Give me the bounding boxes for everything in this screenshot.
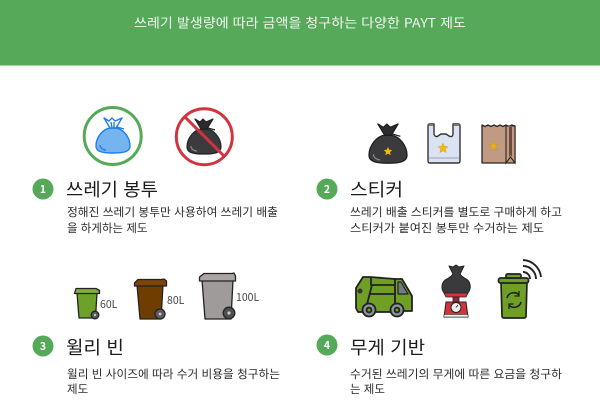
description: 는 제도 — [350, 381, 385, 397]
number badge 1 — [32, 178, 54, 200]
description: 정해진 쓰레기 봉투만 사용하여 쓰레기 배출 — [67, 204, 278, 220]
description: 을 하게하는 제도 — [67, 220, 148, 236]
heading: garbage bag: 쓰레기 봉투 — [66, 176, 158, 202]
number badge 2: 2 — [324, 182, 330, 197]
icon: black bag with star — [369, 124, 407, 163]
icon: forbidden black bag — [176, 109, 232, 165]
heading: wheelie bin: 윌리 빈 — [66, 334, 124, 360]
description: 윌리 빈 사이즈에 따라 수거 비용을 청구하는 — [67, 366, 280, 382]
description: 쓰레기 배출 스티커를 별도로 구매하게 하고 — [350, 204, 562, 220]
panel: weight based — [316, 260, 562, 397]
number badge 3 — [32, 336, 54, 356]
number badge 2 — [316, 178, 338, 200]
icon: 80L brown bin — [134, 279, 166, 319]
icon: paper bag with star — [482, 125, 515, 163]
panel: wheelie bin — [32, 273, 280, 397]
number badge 1: 1 — [40, 182, 46, 197]
label 100L: 100L — [236, 290, 259, 305]
icon: 60L green bin — [74, 288, 100, 319]
icon: garbage truck — [356, 277, 412, 316]
description: 스티커가 붙여진 봉투만 수거하는 제도 — [350, 220, 544, 236]
icon: smart bin with signal — [498, 260, 541, 318]
label 80L: 80L — [167, 293, 185, 308]
icon: bag on scale — [442, 265, 470, 317]
number badge 3: 3 — [40, 339, 46, 354]
title: 쓰레기 발생량에 따라 금액을 청구하는 다양한 PAYT 제도 — [134, 12, 466, 32]
heading: sticker: 스티커 — [350, 176, 403, 202]
header banner — [0, 0, 600, 66]
panel: sticker — [316, 124, 562, 236]
icon: plastic bag with star — [428, 124, 460, 163]
description: 제도 — [67, 381, 88, 397]
heading: weight based: 무게 기반 — [350, 334, 425, 360]
panel: garbage bag — [32, 108, 278, 236]
icon: allowed blue bag — [84, 108, 141, 164]
icon: 100L grey bin — [200, 273, 236, 319]
number badge 4 — [316, 334, 338, 356]
label 60L: 60L — [100, 297, 118, 312]
number badge 4: 4 — [324, 338, 330, 353]
description: 수거된 쓰레기의 무게에 따른 요금을 청구하 — [350, 366, 562, 382]
